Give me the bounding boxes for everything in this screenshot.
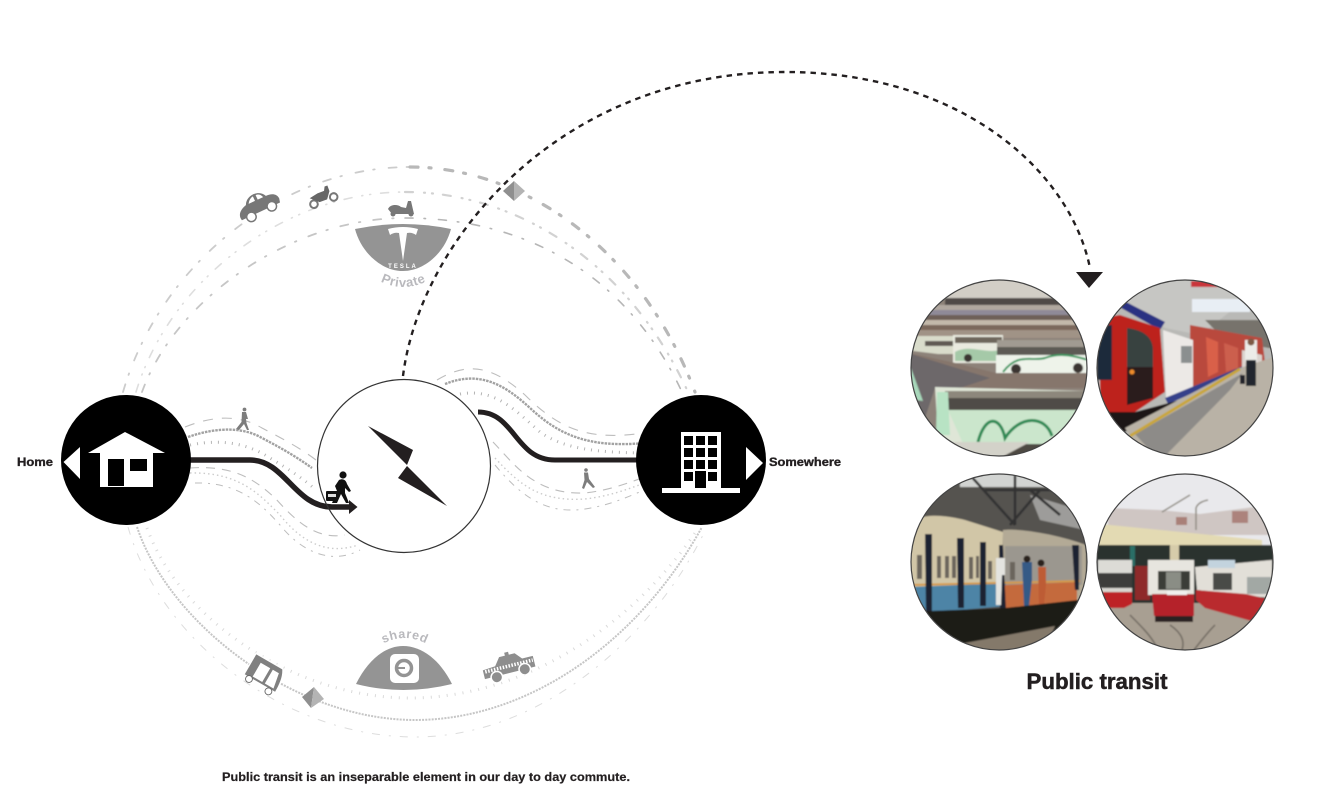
big dashed arc to public transit	[403, 72, 1090, 376]
photo: underground train	[1096, 279, 1274, 457]
heading: public transit: Public transit	[1026, 669, 1168, 694]
private badge	[355, 224, 451, 287]
photo: bus depot	[910, 279, 1088, 457]
label: Home: Home	[17, 455, 53, 469]
icon: car	[234, 185, 283, 225]
icon: scooter	[388, 201, 414, 216]
icon: walker on home route	[236, 408, 249, 430]
home node	[61, 395, 191, 525]
commute line: home to hub	[190, 460, 358, 514]
icon: auto rickshaw	[242, 654, 287, 697]
icon: commuter with briefcase	[326, 471, 351, 503]
icon: direction diamond bottom	[302, 687, 324, 708]
arrow head into public transit	[1076, 272, 1103, 288]
caption: Public transit is an inseparable element in our day to day commute.	[222, 770, 630, 784]
private label: Private	[381, 274, 425, 287]
icon: lightning bolt	[368, 426, 447, 506]
label: Somewhere: Somewhere	[769, 455, 841, 469]
tesla wordmark: TESLA	[388, 264, 418, 270]
shared badge	[356, 631, 452, 690]
icon: walker on somewhere route	[582, 468, 595, 489]
hub circle	[318, 380, 490, 552]
icon: right arrow	[746, 447, 763, 480]
icon: motorbike	[306, 183, 339, 209]
shared transport arcs	[128, 527, 703, 737]
icon: uber logo	[390, 654, 419, 683]
icon: left arrow	[64, 447, 80, 479]
somewhere node	[636, 395, 766, 525]
route lines from home	[185, 418, 360, 556]
photo: red trams	[1096, 473, 1274, 651]
route lines to somewhere	[437, 369, 650, 510]
photo: crowded commuter train	[910, 473, 1088, 651]
shared label: shared	[382, 631, 428, 643]
icon: tesla logo	[388, 227, 418, 261]
icon: direction diamond top	[503, 181, 525, 201]
icon: office building	[662, 432, 740, 493]
commute line: hub to somewhere	[478, 412, 640, 460]
icon: house	[88, 432, 165, 487]
icon: taxi	[480, 646, 537, 685]
private transport arcs	[123, 167, 695, 392]
arrow head	[349, 500, 358, 514]
